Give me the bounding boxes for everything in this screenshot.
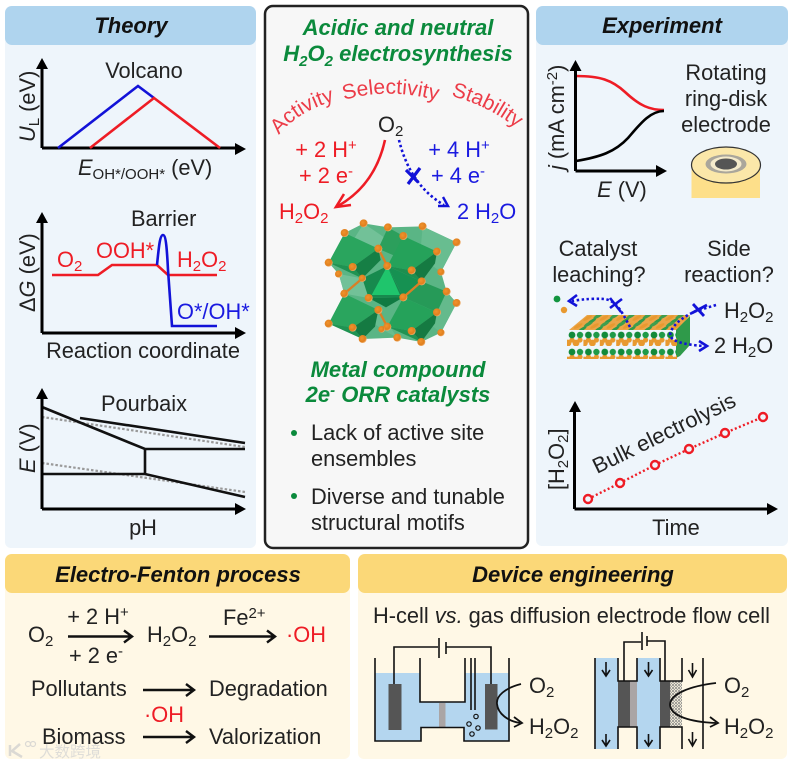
oxygen to hydroxyl radical reaction: 2	[188, 633, 196, 650]
rotating ring-disk electrode label: electrode	[681, 112, 771, 137]
device header: Device engineering	[472, 562, 674, 587]
four electron pathway: 2 H	[457, 199, 491, 224]
chart: Pourbaix diagram: pH	[129, 515, 157, 540]
chart: reaction barrier: Reaction coordinate	[46, 338, 240, 363]
oxygen to hydroxyl radical reaction: + 2 H	[67, 604, 120, 629]
chart: Pourbaix diagram: E (V)	[15, 423, 40, 473]
rotating ring-disk electrode label	[681, 60, 771, 137]
central title line two: 2	[298, 53, 308, 70]
two electron pathway: 2	[320, 210, 328, 227]
oxygen to hydroxyl radical reaction: H	[147, 622, 163, 647]
diagram: H-cell	[375, 638, 578, 742]
experiment header	[536, 6, 788, 45]
rotating ring-disk electrode label: Rotating	[685, 60, 767, 85]
chart: volcano plot: E	[78, 155, 93, 180]
chart: reaction barrier: ΔG (eV)	[15, 233, 40, 312]
curved label: activity, selectivity, stability: Stability	[452, 83, 523, 128]
chart: volcano plot: (eV)	[165, 155, 212, 180]
diagram: H-cell: O	[553, 714, 570, 739]
chart: RRDE polarization curves: -2	[544, 72, 561, 85]
chart: reaction barrier: 2	[218, 258, 226, 275]
oxygen to hydroxyl radical reaction: +	[120, 604, 129, 621]
chart: reaction barrier: O*/OH*	[177, 299, 250, 324]
chart: bulk electrolysis: Bulk electrolysis	[588, 387, 740, 478]
theory header: Theory	[94, 13, 169, 38]
experiment header: Experiment	[602, 13, 724, 38]
four electron pathway: -	[480, 163, 485, 180]
oxygen to hydroxyl radical reaction: 2	[163, 633, 171, 650]
four electron pathway: + 4 H	[428, 137, 481, 162]
curved label: activity, selectivity, stability: Selectivity	[342, 79, 440, 103]
chart: bulk electrolysis: [H	[544, 468, 569, 490]
chart: Pourbaix diagram: Pourbaix	[101, 391, 187, 416]
bullet list: structural motifs	[311, 510, 465, 535]
icon: ring-disk electrode	[692, 147, 760, 198]
four electron pathway: + 4 e	[431, 163, 480, 188]
diagram: gas diffusion electrode flow cell: 2	[765, 725, 773, 742]
catalyst subtitle line two: ORR catalysts	[335, 382, 490, 407]
two electron pathway: + 2 e	[299, 163, 348, 188]
device header	[358, 554, 787, 593]
chart: volcano plot	[15, 58, 246, 183]
watermark	[10, 742, 101, 761]
chart: reaction barrier: 2	[193, 258, 201, 275]
catalyst subtitle: Metal compound	[311, 357, 486, 382]
rotating ring-disk electrode label: ring-disk	[685, 86, 767, 111]
two electron pathway: H	[279, 199, 295, 224]
pollutants degradation: Degradation	[209, 676, 328, 701]
diagram: gas diffusion electrode flow cell: O	[748, 714, 765, 739]
two electron pathway: -	[348, 163, 353, 180]
oxygen to hydroxyl radical reaction: O	[171, 622, 188, 647]
diagram: H-cell: 2	[570, 725, 578, 742]
four electron pathway: +	[481, 137, 490, 154]
four electron pathway	[399, 137, 516, 227]
four electron pathway: 2	[491, 210, 499, 227]
catalyst leaching and side reaction illustration: leaching?	[552, 262, 646, 287]
diagram: gas diffusion electrode flow cell	[595, 632, 773, 749]
diagram: gas diffusion electrode flow cell: 2	[740, 725, 748, 742]
oxygen to hydroxyl radical reaction: O	[28, 622, 45, 647]
watermark: 大数跨境	[39, 742, 101, 761]
oxygen to hydroxyl radical reaction: -	[118, 643, 123, 660]
catalyst leaching and side reaction illustration: O	[748, 298, 765, 323]
two electron pathway: 2	[295, 210, 303, 227]
oxygen to hydroxyl radical reaction: 2+	[248, 605, 266, 622]
chart: reaction barrier: O	[201, 247, 218, 272]
chart: volcano plot: OH*/OOH*	[93, 166, 165, 183]
chart: reaction barrier: O	[57, 247, 74, 272]
oxygen to hydroxyl radical reaction: ·OH	[286, 622, 326, 647]
chart: Pourbaix diagram	[15, 388, 246, 540]
chart: reaction barrier: Barrier	[131, 206, 196, 231]
chart: bulk electrolysis	[544, 387, 778, 540]
pollutants degradation: Pollutants	[31, 676, 127, 701]
panel: electro-Fenton process	[5, 554, 350, 759]
diagram: H-cell: 2	[546, 684, 554, 701]
catalyst leaching and side reaction illustration	[552, 236, 774, 361]
catalyst leaching and side reaction illustration: reaction?	[684, 262, 774, 287]
chart: RRDE polarization curves: j (mA cm	[544, 85, 569, 170]
panel: central summary	[264, 4, 530, 550]
catalyst subtitle line two: -	[330, 382, 335, 399]
two electron pathway: + 2 H	[295, 137, 348, 162]
four electron pathway: O	[499, 199, 516, 224]
oxygen to hydroxyl radical reaction	[28, 604, 326, 668]
chart: reaction barrier: H	[177, 247, 193, 272]
biomass valorization: Valorization	[209, 724, 321, 749]
chart: bulk electrolysis: 2	[555, 460, 572, 468]
oxygen label: O	[378, 112, 395, 137]
chart: bulk electrolysis: ]	[544, 428, 569, 435]
chart: RRDE polarization curves	[544, 60, 667, 202]
panel: device engineering	[358, 554, 787, 759]
chart: volcano plot: (eV)	[15, 71, 40, 118]
central title line two: H	[283, 41, 299, 66]
curved label: activity, selectivity, stability	[272, 79, 523, 135]
chart: bulk electrolysis: Time	[652, 515, 700, 540]
theory header	[5, 6, 256, 45]
two electron pathway: O	[303, 199, 320, 224]
catalyst leaching and side reaction illustration: Catalyst	[559, 236, 637, 261]
central title: Acidic and neutral	[302, 15, 494, 40]
panel: theory	[5, 6, 256, 548]
chart: reaction barrier: OOH*	[96, 238, 155, 263]
chart: RRDE polarization curves: )	[544, 65, 569, 72]
biomass valorization: Biomass	[42, 724, 126, 749]
curved label: activity, selectivity, stability: Activity	[272, 90, 332, 135]
oxygen to hydroxyl radical reaction: Fe	[223, 605, 248, 630]
two electron pathway: +	[348, 137, 357, 154]
bullet list	[291, 420, 505, 535]
bullet list: Diverse and tunable	[311, 484, 505, 509]
two electron pathway	[279, 137, 385, 227]
central title line two: O	[308, 41, 325, 66]
chart: volcano plot: L	[26, 118, 43, 126]
bullet list: ensembles	[311, 446, 417, 471]
pollutants degradation	[31, 676, 328, 701]
central title line two: 2	[324, 53, 334, 70]
electro-Fenton header	[5, 554, 350, 593]
catalyst leaching and side reaction illustration: 2	[740, 309, 748, 326]
diagram: H-cell: O	[529, 673, 546, 698]
chart: volcano plot: U	[15, 126, 40, 142]
device subtitle: H-cell vs. gas diffusion electrode flow cell	[373, 603, 770, 628]
catalyst leaching and side reaction illustration: 2	[765, 309, 773, 326]
bullet list: Lack of active site	[311, 420, 484, 445]
chart: bulk electrolysis: 2	[555, 435, 572, 443]
biomass valorization	[42, 702, 321, 749]
biomass valorization: ·OH	[144, 702, 184, 727]
crystal structure of octahedra	[325, 219, 461, 346]
oxygen to hydroxyl radical reaction: 2	[45, 633, 53, 650]
diagram: gas diffusion electrode flow cell: 2	[741, 684, 749, 701]
panel: experiment	[536, 6, 788, 546]
diagram: H-cell: H	[529, 714, 545, 739]
chart: RRDE polarization curves: E (V)	[597, 177, 647, 202]
chart: volcano plot: Volcano	[105, 58, 183, 83]
catalyst leaching and side reaction illustration: 2	[748, 344, 756, 361]
chart: reaction barrier	[15, 206, 250, 363]
oxygen label: 2	[395, 123, 403, 140]
catalyst leaching and side reaction illustration: O	[756, 333, 773, 358]
catalyst leaching and side reaction illustration: Side	[707, 236, 751, 261]
diagram: H-cell: 2	[545, 725, 553, 742]
chart: reaction barrier: 2	[74, 258, 82, 275]
central title line two: electrosynthesis	[333, 41, 513, 66]
catalyst leaching and side reaction illustration: 2 H	[714, 333, 748, 358]
catalyst leaching and side reaction illustration: H	[724, 298, 740, 323]
catalyst subtitle line two: 2e	[306, 382, 330, 407]
oxygen to hydroxyl radical reaction: + 2 e	[69, 643, 118, 668]
diagram: gas diffusion electrode flow cell: H	[724, 714, 740, 739]
diagram: gas diffusion electrode flow cell: O	[724, 673, 741, 698]
chart: bulk electrolysis: O	[544, 443, 569, 460]
electro-Fenton header: Electro-Fenton process	[55, 562, 301, 587]
